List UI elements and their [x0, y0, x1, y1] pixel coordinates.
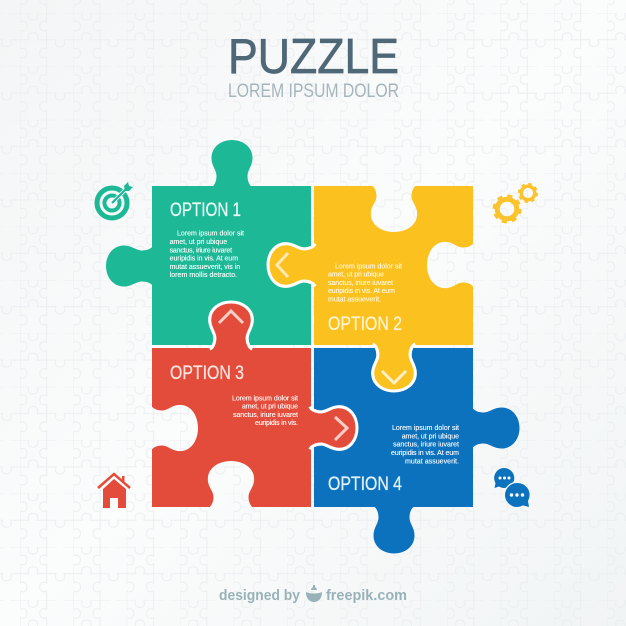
icon: gears: [494, 184, 537, 222]
option 2 text: Lorem ipsum dolor sit: [335, 264, 402, 270]
arrow: up: [219, 311, 243, 323]
title: PUZZLE: [228, 30, 399, 84]
option 2 text: OPTION 2: [328, 313, 402, 335]
option 1 text: amet, ut pri ubique: [170, 239, 227, 246]
piece: yellow: [268, 186, 473, 391]
option 4 text: [328, 425, 459, 495]
option 3 text: sanctus, iriure iuvaret: [233, 412, 298, 419]
option 1 text: lorem mollis detracto.: [170, 272, 237, 279]
icon: freepik logo: [306, 585, 322, 602]
option 3 text: amet, ut pri ubique: [242, 404, 298, 410]
icon: house: [98, 474, 130, 508]
option 4 text: mutat assueverit.: [405, 458, 459, 466]
arrow: right: [335, 417, 347, 440]
option 1 text: [170, 199, 244, 279]
option 3 text: OPTION 3: [170, 362, 244, 384]
option 4 text: OPTION 4: [328, 473, 402, 495]
option 2 text: amet, ut pri ubique: [328, 272, 384, 278]
arrow: left: [277, 253, 288, 277]
piece: blue: [314, 348, 520, 554]
footer credit: freepik.com: [326, 588, 407, 604]
option 2 text: mutat assueverit.: [328, 296, 381, 304]
puzzle pieces: [106, 140, 520, 554]
option 1 text: euripidis in vis. At eum: [170, 256, 238, 263]
piece: green: [106, 140, 311, 345]
option 4 text: sanctus, iriure iuvaret: [393, 442, 459, 448]
icon: chat bubbles: [494, 468, 530, 508]
option 1 text: sanctus, iriure iuvaret: [170, 247, 232, 254]
option 2 text: [328, 264, 402, 335]
option 3 text: euripidis in vis.: [255, 420, 298, 427]
option 4 text: amet, ut pri ubique: [402, 434, 459, 440]
arrow: down: [382, 371, 406, 383]
option 1 text: mutat assueverit, vis in: [170, 264, 240, 271]
piece: red: [152, 302, 357, 507]
footer credit: designed by: [219, 588, 300, 604]
option 3 text: [170, 362, 298, 427]
option 4 text: euripidis in vis. At eum: [391, 450, 459, 457]
option 3 text: Lorem ipsum dolor sit: [232, 396, 298, 402]
icon: target: [97, 182, 133, 218]
option 2 text: euripidis in vis. At eum: [328, 288, 395, 295]
option 4 text: Lorem ipsum dolor sit: [392, 425, 459, 432]
option 1 text: OPTION 1: [170, 199, 241, 221]
option 2 text: sanctus, iriure iuvaret: [328, 280, 393, 287]
subtitle: LOREM IPSUM DOLOR: [228, 81, 399, 102]
option 1 text: Lorem ipsum dolor sit: [177, 230, 244, 238]
footer credit: [219, 585, 407, 604]
